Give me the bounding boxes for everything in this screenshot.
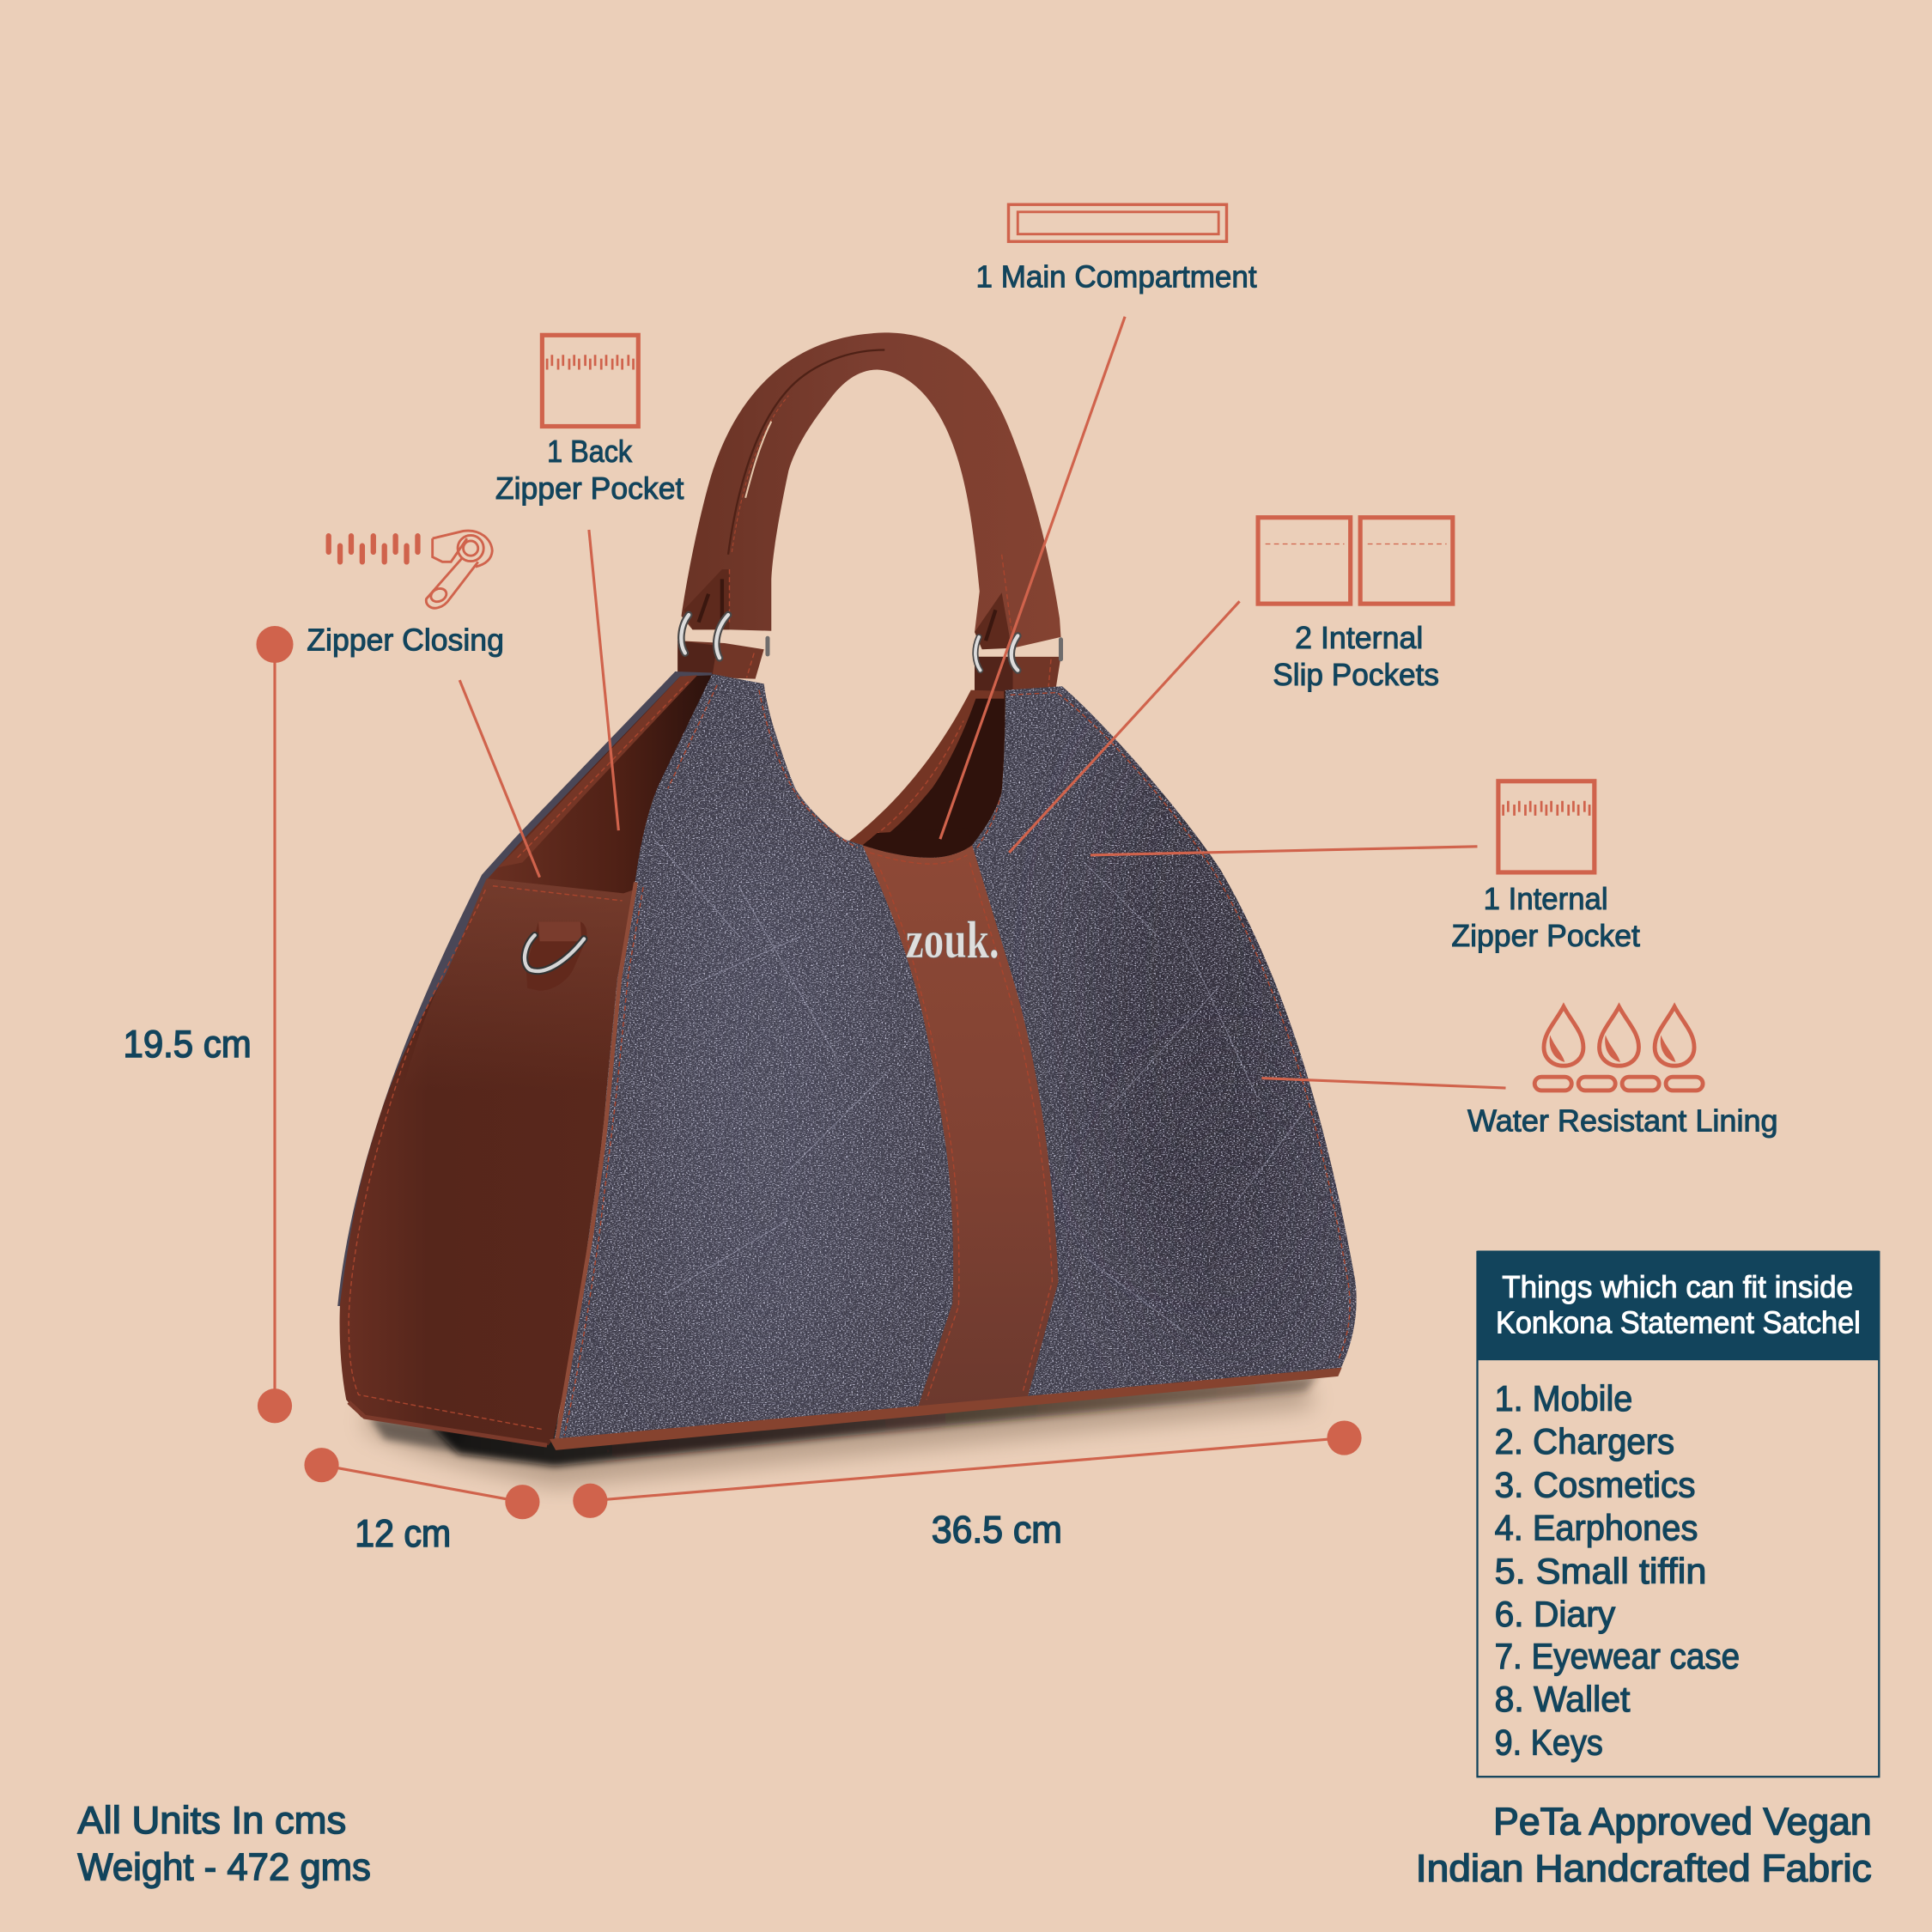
note: vegan and handcrafted: PeTa Approved Vegan (1493, 1801, 1872, 1844)
interior back pocket (487, 675, 712, 902)
item list: 9. Keys (1495, 1722, 1603, 1762)
handbag illustration (337, 332, 1380, 1487)
label: slip pockets: Slip Pockets (1273, 658, 1439, 692)
fabric front panel (554, 674, 1357, 1439)
dimension: depth (304, 1448, 540, 1555)
D ring (525, 921, 587, 991)
item list: 1. Mobile (1495, 1378, 1632, 1419)
item list: 5. Small tiffin (1495, 1551, 1706, 1591)
leader line (940, 317, 1125, 839)
item list: 3. Cosmetics (1495, 1464, 1695, 1504)
label: water resistant lining: Water Resistant Lining (1467, 1103, 1778, 1138)
leader line (1261, 1078, 1506, 1088)
item list: 2. Chargers (1495, 1421, 1674, 1461)
brand logo: zouk. (906, 911, 999, 969)
label: back zipper pocket (495, 434, 683, 506)
callout: 1 internal zipper pocket (1091, 781, 1640, 953)
label: slip pockets (1273, 621, 1439, 692)
icon: internal zipper pocket (1498, 781, 1595, 872)
label: back zipper pocket: Zipper Pocket (495, 471, 683, 506)
panel header: Things which can fit inside (1502, 1270, 1853, 1304)
dimension: height: 19.5 cm (123, 1024, 252, 1066)
panel: things which can fit inside (1478, 1250, 1879, 1777)
metal rings (681, 615, 1060, 671)
label: internal zipper pocket: 1 Internal (1484, 882, 1608, 916)
item list: 8. Wallet (1495, 1679, 1631, 1719)
note: vegan and handcrafted (1416, 1801, 1872, 1890)
item list (1495, 1378, 1740, 1762)
label: main compartment: 1 Main Compartment (975, 259, 1257, 294)
side leather panel (340, 878, 635, 1445)
note: units and weight: Weight - 472 gms (77, 1847, 371, 1889)
icon: water drops (1534, 1006, 1703, 1091)
interior opening (850, 691, 1005, 858)
callout: water resistant lining (1261, 1006, 1778, 1138)
note: units and weight (77, 1800, 371, 1889)
leader line (1009, 601, 1240, 853)
label: back zipper pocket: 1 Back (547, 434, 632, 469)
icon: main compartment (1009, 204, 1226, 241)
icon: slip pockets (1258, 518, 1453, 604)
centre strap (862, 845, 1059, 1407)
note: units and weight: All Units In cms (77, 1800, 346, 1842)
label: internal zipper pocket (1451, 882, 1640, 953)
icon: zipper pull (329, 531, 492, 608)
bag shadow (365, 1375, 1318, 1487)
label: slip pockets: 2 Internal (1295, 621, 1423, 655)
base trim (550, 1368, 1342, 1450)
callout: 2 internal slip pockets (1009, 518, 1453, 853)
icon: back zipper pocket (542, 335, 638, 426)
label: internal zipper pocket: Zipper Pocket (1451, 919, 1640, 953)
handle (677, 332, 1060, 694)
opening shadow above strap (862, 828, 972, 858)
leader line (1091, 847, 1478, 855)
item list: 7. Eyewear case (1495, 1636, 1740, 1676)
dimension: width (573, 1420, 1362, 1552)
label: zipper closing: Zipper Closing (307, 623, 504, 658)
callout: zipper closing (307, 531, 540, 878)
dimension: width: 36.5 cm (932, 1510, 1062, 1552)
item list: 6. Diary (1495, 1594, 1615, 1634)
panel header: Konkona Statement Satchel (1496, 1306, 1861, 1340)
dimension: height (123, 626, 294, 1423)
dimension: depth: 12 cm (355, 1513, 451, 1555)
leader line (459, 680, 540, 878)
callout: 1 back zipper pocket (495, 335, 683, 830)
handle tabs (677, 641, 1060, 694)
leader line (589, 530, 618, 830)
panel header (1478, 1250, 1879, 1360)
callout: 1 main compartment (940, 204, 1257, 839)
note: vegan and handcrafted: Indian Handcrafted Fabric (1416, 1848, 1872, 1890)
back fabric edge (337, 671, 712, 1306)
item list: 4. Earphones (1495, 1508, 1698, 1548)
